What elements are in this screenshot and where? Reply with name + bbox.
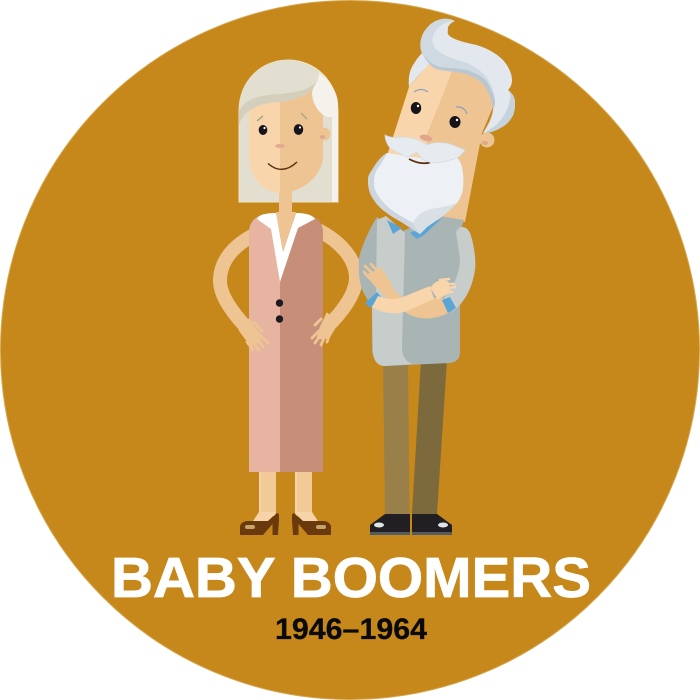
woman ear (318, 128, 330, 140)
man right hand (431, 279, 455, 299)
woman left shoe (240, 513, 279, 535)
woman nose (275, 144, 285, 148)
woman legs (253, 470, 318, 521)
man right sleeve (442, 227, 475, 311)
woman dress (249, 212, 323, 472)
dress neckline (276, 212, 296, 252)
man moustache (385, 135, 465, 163)
woman eyebrows (257, 113, 307, 121)
man left hand (364, 264, 390, 288)
figure: man (359, 19, 515, 535)
man beard (368, 153, 463, 234)
woman right hand (312, 313, 338, 345)
woman right shoe (292, 513, 331, 535)
man trousers (383, 360, 447, 514)
man shirt collar (387, 218, 442, 239)
man shoes (370, 514, 452, 535)
figure: woman (220, 60, 356, 535)
man right cuff (442, 297, 456, 313)
woman right arm (320, 231, 356, 322)
man crossed arms (364, 264, 456, 318)
woman hair front (239, 60, 338, 125)
man eyes (411, 102, 460, 128)
man left cuff (365, 292, 381, 308)
woman left arm (220, 236, 252, 326)
woman face (249, 88, 323, 193)
man head (385, 58, 496, 222)
man lower forearm (372, 286, 434, 313)
man nose (419, 133, 433, 143)
woman hair back (239, 60, 338, 202)
dress collar (257, 213, 315, 282)
man mouth (409, 159, 430, 163)
woman left hand (239, 319, 268, 350)
man hair (409, 19, 515, 133)
man ear (480, 132, 494, 148)
woman neck (279, 188, 292, 228)
dress buttons (276, 299, 283, 323)
man eyebrows (414, 90, 467, 114)
years: 1946–1964 (275, 613, 427, 646)
title: BABY BOOMERS (111, 546, 591, 610)
man upper forearm (376, 280, 450, 318)
man vest (359, 216, 475, 366)
woman smile (268, 162, 297, 169)
woman eyes (259, 124, 303, 135)
